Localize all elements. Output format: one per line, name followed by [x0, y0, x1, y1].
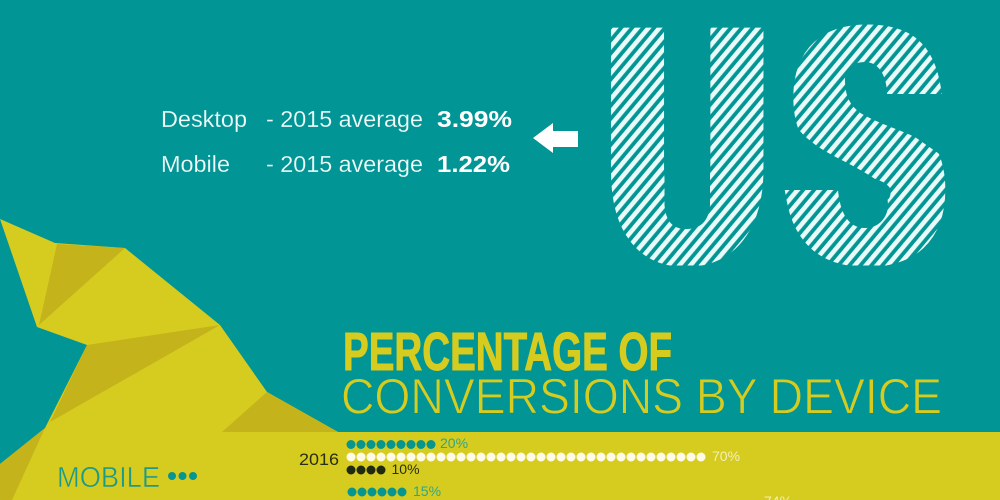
low-poly yellow landscape — [0, 219, 1000, 500]
desktop stat row — [161, 106, 512, 132]
mobile stat row: - 2015 average — [266, 151, 423, 177]
arrow pointing left — [533, 123, 578, 153]
desktop dot bar 10%: 10% — [392, 461, 420, 477]
heading: CONVERSIONS BY DEVICE — [341, 368, 942, 424]
mobile stat row: 1.22% — [437, 151, 510, 177]
large striped US lettering — [600, 0, 960, 313]
mobile stat row: Mobile — [161, 151, 230, 177]
tablet dot bar 20%: 20% — [440, 435, 468, 451]
smartphone dot bar 70% — [346, 448, 740, 464]
mobile label with dots: MOBILE — [57, 462, 160, 494]
mobile stat row — [161, 151, 510, 177]
desktop dot bar 10% — [346, 461, 420, 477]
year label 2016: 2016 — [299, 450, 339, 469]
desktop stat row: Desktop — [161, 106, 247, 132]
heading: PERCENTAGE OF — [343, 322, 672, 382]
desktop stat row: - 2015 average — [266, 106, 423, 132]
next year dot bar 15% — [348, 483, 441, 499]
heading — [341, 322, 942, 424]
smartphone dot bar 70%: 70% — [712, 448, 740, 464]
desktop stat row: 3.99% — [437, 106, 512, 132]
tablet dot bar 20% — [346, 435, 468, 451]
next year dot bar 15%: 15% — [413, 483, 441, 499]
